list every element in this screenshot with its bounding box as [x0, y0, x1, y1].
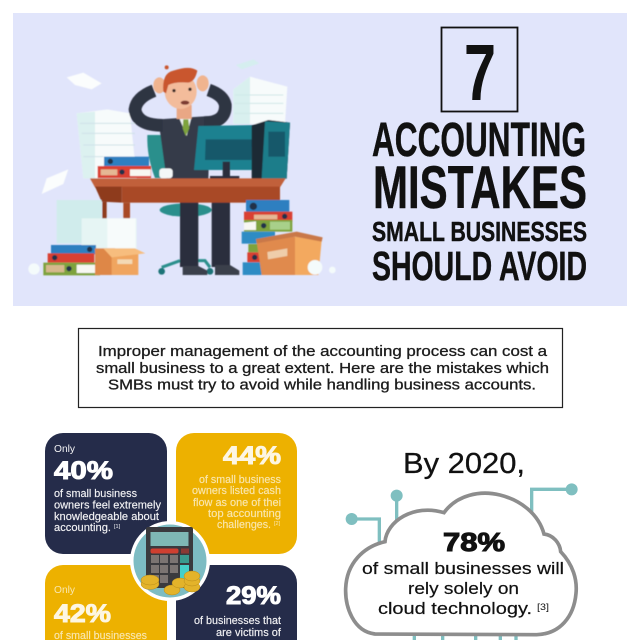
cloud statistic text: of small businesses will [362, 560, 564, 578]
cloud with circuit lines [346, 483, 578, 640]
number badge: 7: 7 [464, 28, 496, 117]
panel: 44% statistic: flow as one of thei [193, 497, 281, 509]
icon: calculator with coins [130, 521, 210, 601]
panel: 40% statistic: owners feel extremely [54, 500, 161, 512]
cloud statistic text [362, 527, 564, 618]
panel: 40% statistic: [1] [114, 524, 121, 530]
panel: 44% statistic: [2] [274, 521, 281, 527]
panel: 42% statistic: Only [54, 585, 75, 596]
intro text box: small business to a great extent. Here are the mistakes which [96, 361, 549, 377]
title [372, 114, 587, 289]
panel: 44% statistic: of small business [199, 474, 281, 486]
panel: 40% statistic: knowledgeable about [54, 511, 159, 523]
panel: 29% statistic: 29% [226, 582, 281, 610]
panel: 40% statistic [45, 433, 167, 554]
intro text box: Improper management of the accounting process can cost a [98, 344, 548, 360]
cloud statistic text: 78% [443, 527, 505, 557]
cloud statistic text: [3] [537, 602, 549, 612]
panel: 40% statistic: 40% [54, 457, 113, 485]
panel: 29% statistic: are victims of [216, 627, 282, 639]
panel: 42% statistic [45, 565, 167, 640]
panel: 29% statistic [176, 565, 297, 640]
panel: 40% statistic: accounting. [54, 522, 111, 534]
panel: 44% statistic [176, 433, 297, 554]
panel: 40% statistic: Only [54, 444, 75, 455]
intro text box: SMBs must try to avoid while handling business accounts. [108, 378, 536, 394]
intro text box [78, 328, 562, 408]
panel: 44% statistic: 44% [223, 442, 281, 470]
panel: 29% statistic: of businesses that [194, 615, 281, 627]
panel: header banner [13, 13, 627, 306]
number badge: 7 [442, 28, 518, 117]
heading: By 2020: By 2020, [403, 448, 525, 480]
panel: 44% statistic: challenges. [217, 519, 271, 531]
panel: 44% statistic: owners listed cash [192, 485, 281, 497]
cloud statistic text: cloud technology. [378, 600, 532, 618]
cloud statistic text: rely solely on [408, 580, 519, 598]
panel: 44% statistic: top accounting [208, 508, 281, 520]
panel: 42% statistic: 42% [54, 600, 111, 628]
panel: 40% statistic: of small business [54, 488, 137, 500]
illustration: stressed accountant at desk [28, 59, 336, 275]
